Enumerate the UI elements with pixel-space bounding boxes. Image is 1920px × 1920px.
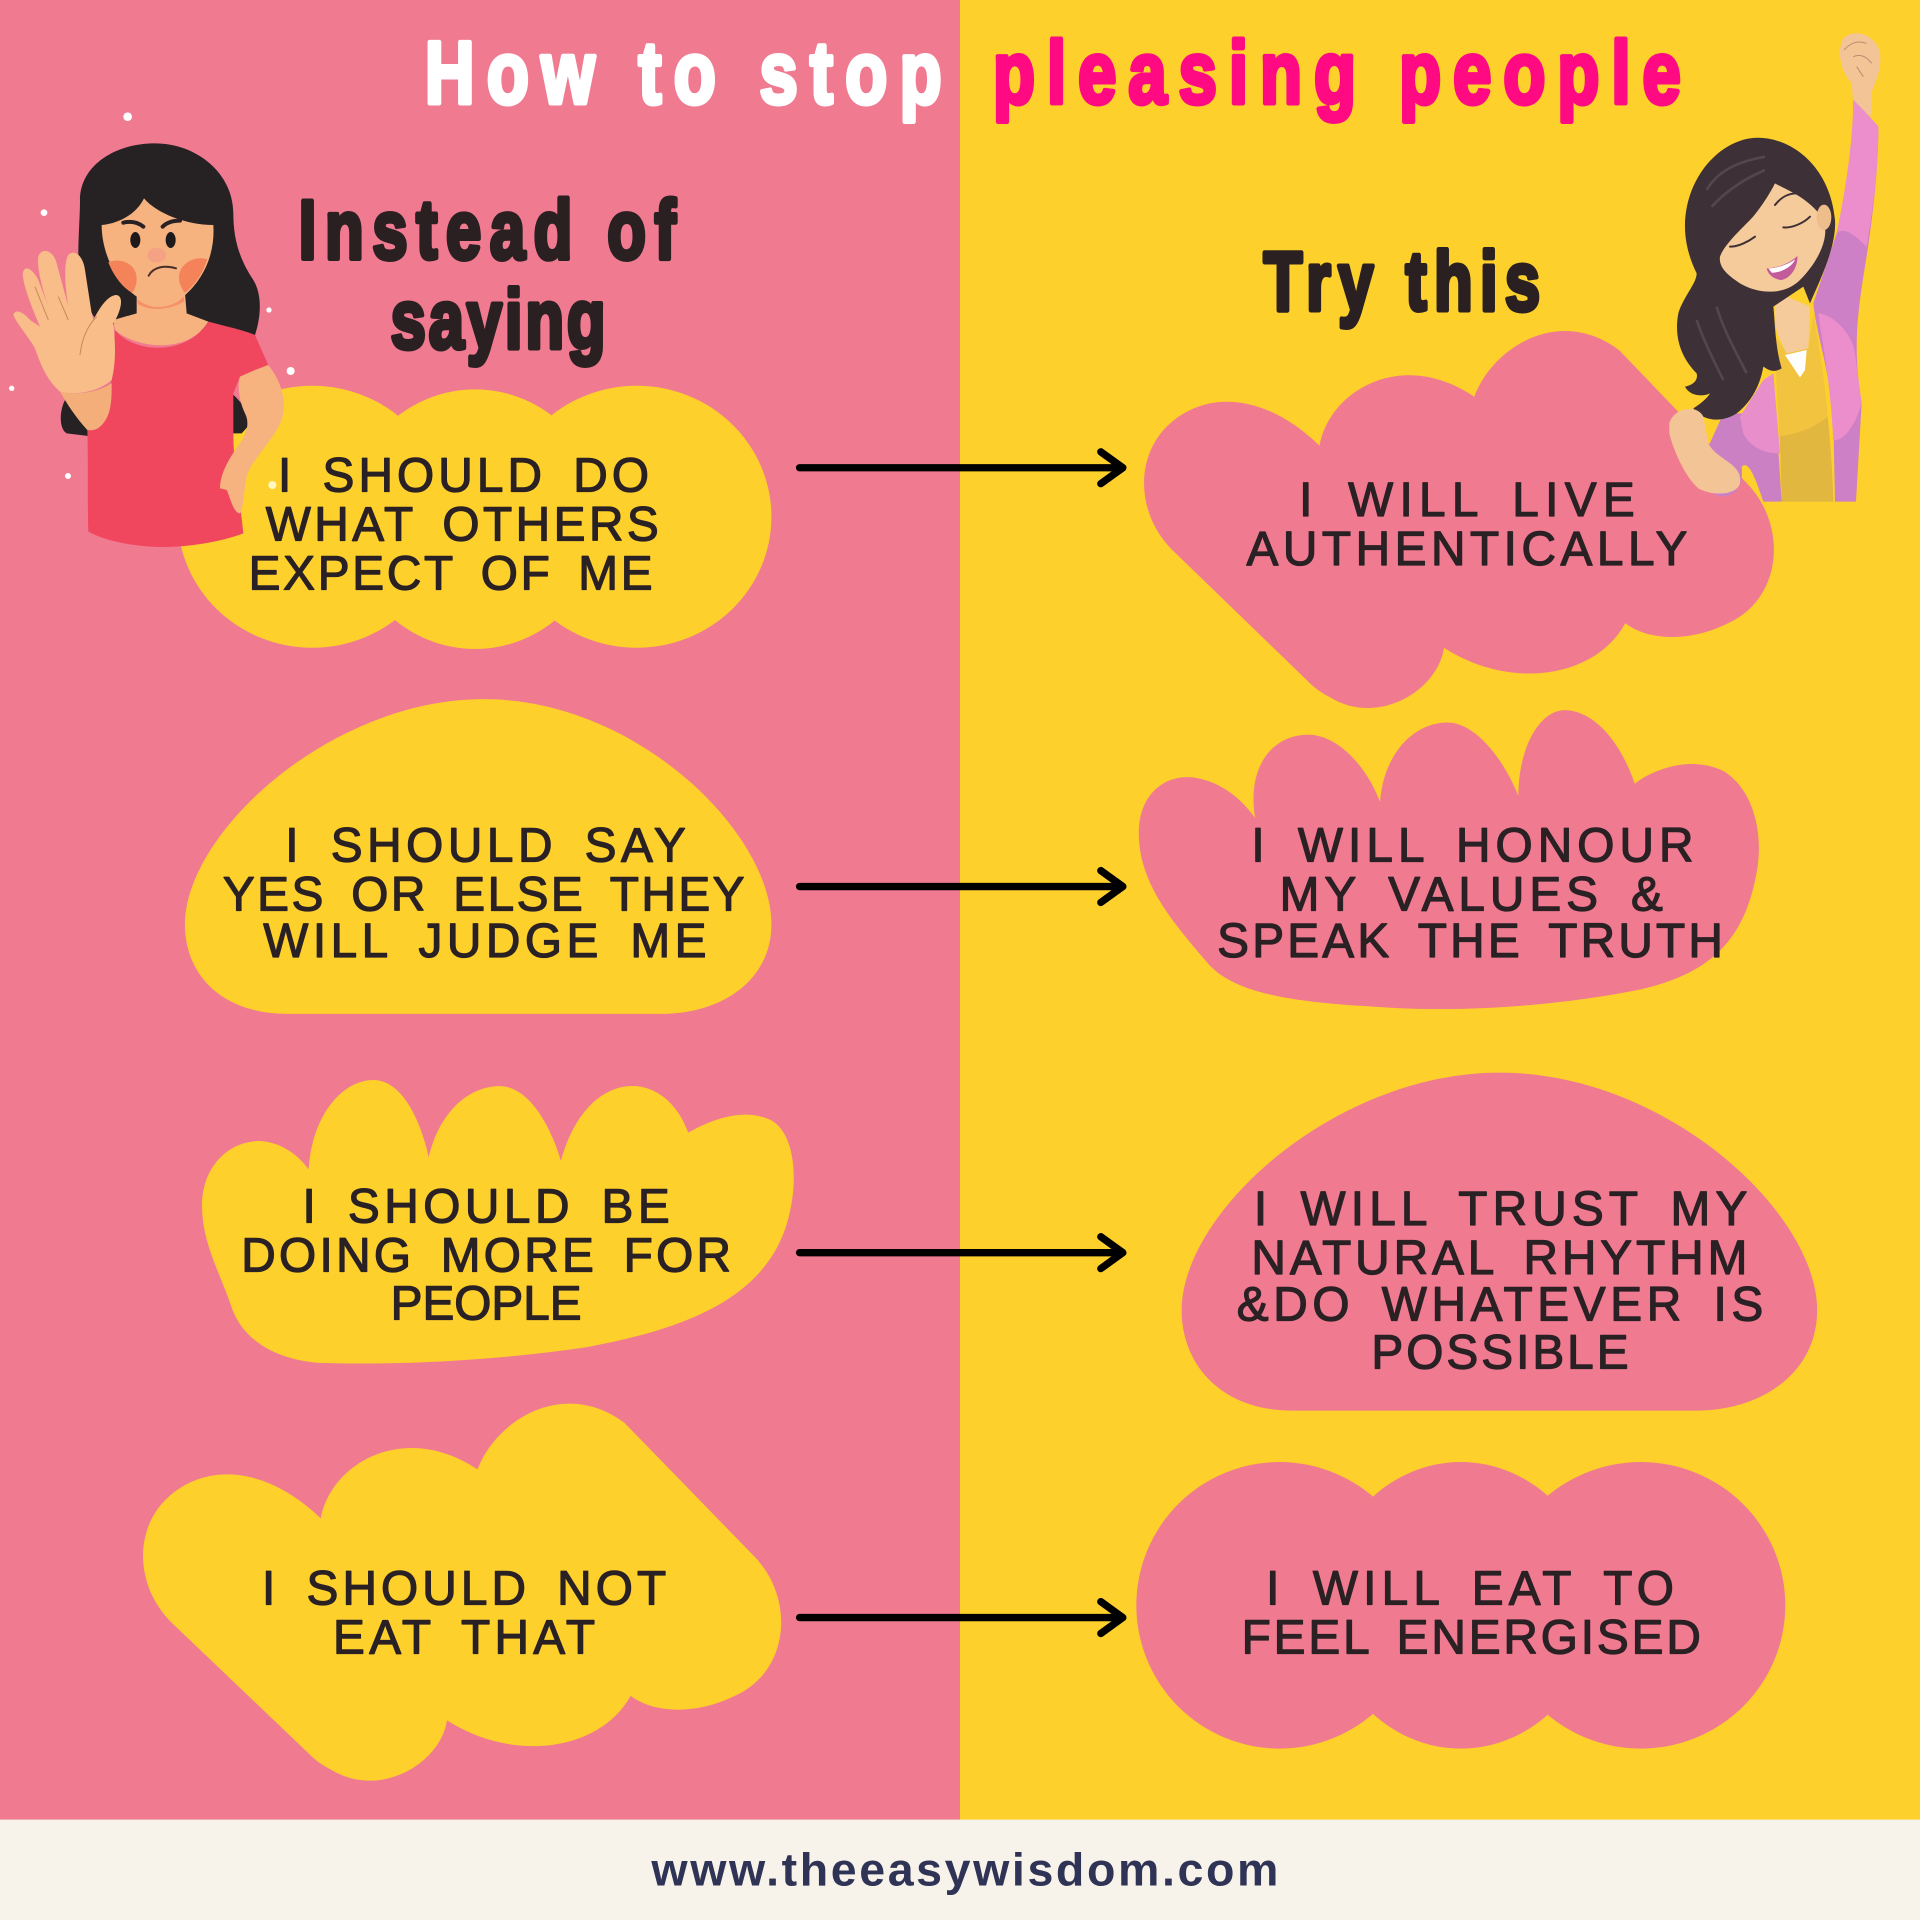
arrow 3 [800,1237,1123,1269]
statement text: WHAT OTHERS [266,499,659,552]
panel: right yellow background [960,0,1920,1821]
statement text [1237,1183,1763,1379]
right statement 2 [1139,710,1759,1009]
statement text: I SHOULD NOT [262,1563,666,1616]
statement text [1217,819,1723,968]
arrow 4 [800,1602,1123,1633]
statement text: AUTHENTICALLY [1247,523,1687,576]
right statement 3 [1182,1073,1817,1411]
bubble: pink scalloped cloud [1139,710,1759,1009]
statement text: I WILL LIVE [1299,474,1635,527]
statement text: PEOPLE [391,1277,582,1330]
left statement 3 [202,1080,794,1364]
statement text: I WILL TRUST MY [1254,1183,1747,1236]
statement text: MY VALUES & [1280,868,1663,921]
icon: happy girl raising fist [1669,33,1880,502]
statement text: DOING MORE FOR [241,1230,731,1283]
title part: pleasing people: pleasing people [993,23,1681,122]
statement text: YES OR ELSE THEY [223,868,744,921]
arrow 2 [800,871,1123,902]
statement text [223,819,744,968]
title part: how to stop: How to stop [425,23,942,122]
heading: instead of saying: saying [391,272,606,366]
bubble: yellow scalloped cloud [202,1080,794,1364]
left statement 1 [178,386,771,649]
bubble: three-lobe yellow cloud [178,386,771,649]
right statement 1 [1144,331,1774,708]
statement text [1242,1563,1701,1665]
statement text [249,450,659,601]
statement text: EXPECT OF ME [249,548,653,601]
bubble: yellow slanted cloud [143,1404,781,1781]
statement text: I SHOULD BE [302,1181,670,1234]
statement text: EAT THAT [333,1612,595,1665]
footer website text: www.theeasywisdom.com [650,1844,1278,1896]
panel: left pink background [0,0,960,1821]
statement text: SPEAK THE TRUTH [1217,915,1723,968]
arrow 1 [800,452,1123,484]
title [425,23,1681,122]
statement text: I WILL HONOUR [1251,819,1693,872]
bubble: pink slanted cloud [1144,331,1774,708]
statement text: NATURAL RHYTHM [1251,1232,1747,1285]
statement text: FEEL ENERGISED [1242,1612,1701,1665]
right statement 4 [1136,1462,1785,1749]
bubble: three-lobe pink cloud [1136,1462,1785,1749]
left statement 4 [143,1404,781,1781]
footer band [0,1820,1920,1920]
statement text: I SHOULD SAY [285,819,686,872]
statement text: I WILL EAT TO [1266,1563,1674,1616]
statement text: I SHOULD DO [278,450,649,503]
left statement 2 [185,699,771,1014]
statement text [262,1563,666,1665]
heading: instead of saying: Instead of [299,183,676,276]
icon: angry girl with stop hand [9,112,295,547]
statement text [1247,474,1687,576]
statement text: WILL JUDGE ME [263,915,707,968]
bubble: pink dome [1182,1073,1817,1411]
statement text: POSSIBLE [1371,1326,1629,1379]
bubble: yellow dome [185,699,771,1014]
statement text [241,1181,731,1330]
statement text: &DO WHATEVER IS [1237,1279,1763,1332]
heading: instead of saying [299,183,676,366]
heading: try this: Try this [1264,234,1540,328]
